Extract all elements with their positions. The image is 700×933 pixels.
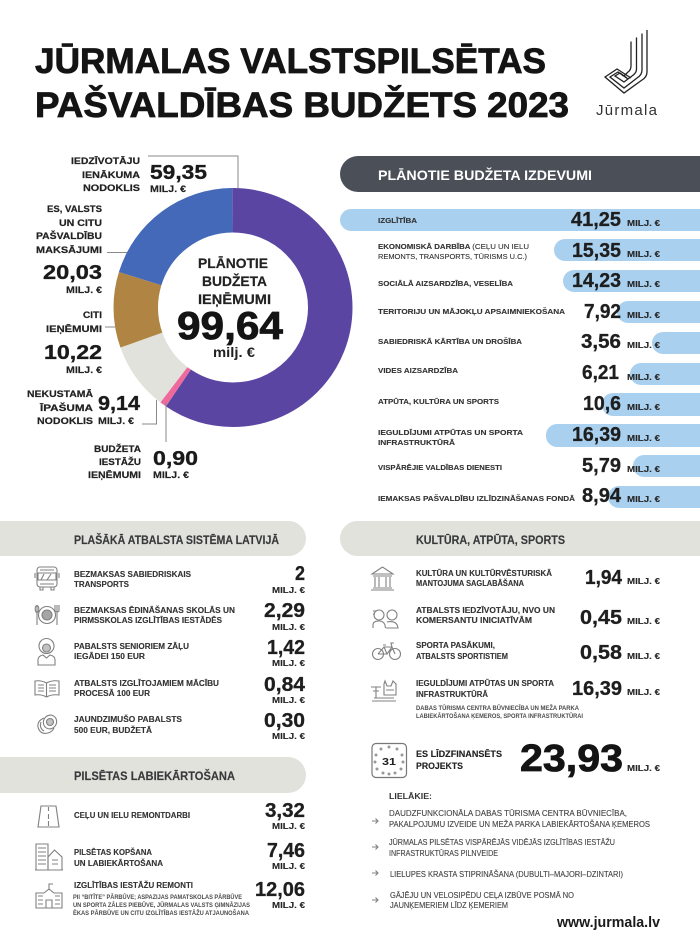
item: community initiatives [416,606,660,629]
item: city maintenance: MILJ. € [272,861,305,871]
revenue label: income tax: IENĀKUMA [82,170,140,181]
row: territory and housing: TERITORIJU UN MĀJOKĻU APSAIMNIEKOŠANA [378,307,566,316]
item: sports events: ATBALSTS SPORTISTIEM [416,652,508,661]
item: community initiatives: ATBALSTS IEDZĪVOTĀJU, NVO UN [416,606,555,615]
EU co-financed total [416,738,660,780]
list: largest projects: PAKALPOJUMU IZVEIDE UN MEŽA PARKA LABIEKĀRTOŠANA ĶEMEROS [389,820,650,829]
item: school repairs: 12,06 [255,879,305,901]
revenue label: institutions: BUDŽETA [94,443,141,455]
item: free school meals: BEZMAKSAS ĒDINĀŠANAS SKOLĀS UN [74,606,235,615]
list: largest projects: GĀJĒJU UN VELOSIPĒDU CEĻA IZBŪVE POSMĀ NO [390,891,574,900]
revenue label: income tax [71,156,238,195]
icon: senior [38,638,55,665]
row: equalisation fund: IEMAKSAS PAŠVALDĪBU IZLĪDZINĀŠANAS FONDĀ [378,494,576,503]
row: economic activity: 15,35 [572,240,621,262]
revenue label: institutions: IESTĀŽU [99,456,141,468]
item: free school meals: 2,29 [264,600,305,622]
item: cultural heritage: KULTŪRA UN KULTŪRVĒSTURISKĀ [416,569,552,578]
list: largest projects: LIELĀKIE: [389,791,432,801]
title [35,42,569,125]
heading: wider support system [0,521,306,556]
row: economic activity: EKONOMISKĀ DARBĪBA (CEĻU UN IELU [378,242,529,251]
revenue label: property tax: MILJ. € [98,416,135,427]
row: economic activity: REMONTS, TRANSPORTS, TŪRISMS U.C.) [378,252,527,261]
revenue label: property tax: NEKUSTAMĀ [27,389,93,400]
item: cultural heritage: 1,94 [585,567,623,589]
revenue label: property tax: NODOKLIS [37,416,93,427]
website: www.jurmala.lv [556,914,661,931]
icon: road [38,806,59,827]
row: investments: 16,39 [572,424,621,446]
revenue label: other: 10,22 [44,341,102,364]
panel: culture items [371,567,660,720]
icon: plate and cutlery [35,605,59,625]
arrow: project 4 [372,898,378,902]
row: environment: MILJ. € [627,372,660,382]
item: cultural heritage: MILJ. € [627,576,660,586]
heading: planned expenditure [340,156,700,192]
item: free public transport: TRANSPORTS [74,580,130,589]
item: city maintenance: 7,46 [267,840,305,862]
row: education [340,209,700,231]
list: largest projects [372,791,650,910]
icon: book [35,681,59,697]
icon: school [36,884,62,908]
row: recreation, culture, sport: 10,6 [583,393,621,415]
row: investments [378,424,700,447]
item: sports infrastructure: INFRASTRUKTŪRĀ [416,690,488,699]
logo: Jūrmala [596,30,658,119]
item: senior benefit: IEGĀDEI 150 EUR [74,652,145,661]
row: public order [378,331,700,354]
item: road repairs: CEĻU UN IELU REMONTDARBI [74,811,190,820]
revenue label: institutions: IEŅĒMUMI [88,470,141,481]
item: sports events: 0,58 [580,642,622,664]
item: school repairs: MILJ. € [272,900,305,910]
donut centre total: PLĀNOTIE [198,255,268,271]
item: free school meals: PIRMSSKOLAS IZGLĪTĪBAS IESTĀDĒS [74,616,223,625]
arrow: project 3 [372,870,378,876]
item: road repairs [74,800,305,831]
row: general government [378,455,700,477]
row: investments: INFRASTRUKTŪRĀ [378,438,456,447]
donut centre total: IEŅĒMUMI [198,291,271,307]
title: PAŠVALDĪBAS BUDŽETS 2023 [35,85,569,125]
item: student support: ATBALSTS IZGLĪTOJAMIEM MĀCĪBU [74,679,219,688]
heading: city improvement: PILSĒTAS LABIEKĀRTOŠANA [74,768,235,783]
row: education: IZGLĪTĪBA [378,216,418,225]
icon: temple [371,567,394,590]
row: equalisation fund: MILJ. € [627,494,660,504]
list: largest projects: INFRASTRUKTŪRAS PILNVEIDE [389,849,498,858]
heading: planned expenditure: PLĀNOTIE BUDŽETA IZDEVUMI [378,166,592,183]
item: senior benefit: 1,42 [267,637,305,659]
revenue label: other: IEŅĒMUMI [46,324,102,335]
panel: wider support items [35,563,306,741]
row: environment [378,362,700,385]
list: largest projects: JŪRMALAS PILSĒTAS VISPĀRĒJĀS VIDĒJĀS IZGLĪTĪBAS IESTĀŽU [389,838,615,847]
row: investments: MILJ. € [627,433,660,443]
row: public order: SABIEDRISKĀ KĀRTĪBA UN DROŠĪBA [378,337,523,346]
row: general government: 5,79 [582,455,621,477]
row: recreation, culture, sport [378,393,700,416]
row: economic activity: MILJ. € [627,249,660,259]
revenue label: EU, state payments: 20,03 [43,261,102,284]
item: student support [74,674,306,705]
row: general government: VISPĀRĒJIE VALDĪBAS DIENESTI [378,463,502,472]
revenue label: property tax: 9,14 [98,392,141,415]
revenue label: institutions: MILJ. € [153,470,190,481]
item: cultural heritage: MANTOJUMA SAGLABĀŠANA [416,579,524,588]
item: sports infrastructure: MILJ. € [627,687,660,697]
item: sports events: MILJ. € [627,651,660,661]
revenue label: income tax: 59,35 [150,161,207,184]
revenue label: EU, state payments: MAKSĀJUMI [36,245,102,256]
item: school repairs: UN SPORTA ZĀLES PIEBŪVE, JŪRMALAS VALSTS ĢIMNĀZIJAS [73,902,250,909]
item: sports infrastructure: DABAS TŪRISMA CENTRA BŪVNIECĪBA UN MEŽA PARKA [416,704,580,712]
revenue label: income tax: IEDZĪVOTĀJU [71,156,140,167]
item: free public transport: MILJ. € [272,585,305,595]
revenue label: EU, state payments: MILJ. € [66,285,103,296]
item: newborn benefit: 0,30 [264,710,305,732]
icon: city buildings [35,844,63,870]
row: social protection: SOCIĀLĀ AIZSARDZĪBA, VESELĪBA [378,279,514,288]
revenue label: EU, state payments: ES, VALSTS [47,204,102,215]
item: free school meals [74,600,305,632]
icon: people [373,610,398,628]
item: road repairs: 3,32 [265,800,305,822]
item: school repairs: IZGLĪTĪBAS IESTĀŽU REMONTI [74,881,193,890]
revenue label: EU, state payments: PAŠVALDĪBU [36,230,102,242]
item: newborn benefit [74,710,305,741]
item: school repairs: PII “BITĪTE” PĀRBŪVE; ASPAZIJAS PAMATSKOLAS PĀRBŪVE [73,894,242,901]
donut centre total: BUDŽETA [202,272,267,289]
list: largest projects: LIELUPES KRASTA STIPRINĀŠANA (DUBULTI–MAJORI–DZINTARI) [390,870,623,879]
list: largest projects: DAUDZFUNKCIONĀLA DABAS TŪRISMA CENTRA BŪVNIECĪBA, [389,809,627,818]
row: equalisation fund [378,485,700,508]
row: general government: MILJ. € [627,464,660,474]
item: city maintenance: PILSĒTAS KOPŠANA [74,848,152,857]
item: sports events [416,641,660,664]
revenue label: EU, state payments: UN CITU [59,218,102,229]
donut centre total [177,255,283,360]
row: environment: 6,21 [582,362,619,384]
item: community initiatives: 0,45 [580,607,622,629]
item: school repairs [73,879,305,917]
EU co-financed total: ES LĪDZFINANSĒTS [416,749,502,759]
heading: wider support system: PLAŠĀKĀ ATBALSTA SISTĒMA LATVIJĀ [74,532,279,547]
item: road repairs: MILJ. € [272,821,305,831]
arrow: project 2 [372,844,378,850]
arrow: project 1 [372,818,378,824]
row: education: 41,25 [571,209,621,231]
item: sports infrastructure: LABIEKĀRTOŠANA ĶEMEROS, SPORTA INFRASTRUKTŪRAI [416,712,583,720]
item: senior benefit: MILJ. € [272,658,305,668]
item: school repairs: ĒKAS PĀRBŪVE UN CITU IZGLĪTĪBAS IESTĀŽU ATJAUNOŠANA [73,909,250,917]
revenue label: institutions [88,402,198,481]
revenue label: property tax: ĪPAŠUMA [39,402,93,414]
item: student support: PROCESĀ 100 EUR [74,689,150,698]
item: newborn benefit: MILJ. € [272,731,305,741]
item: student support: 0,84 [264,674,306,696]
heading: culture, recreation, sports [340,521,700,556]
row: territory and housing [378,301,700,323]
item: newborn benefit: 500 EUR, BUDŽETĀ [74,726,152,735]
row: social protection [378,270,700,292]
revenue label: institutions: 0,90 [153,447,198,470]
EU co-financed total: MILJ. € [627,763,660,773]
item: free public transport: BEZMAKSAS SABIEDRISKAIS [74,570,192,579]
revenue label: property tax [27,389,156,427]
row: territory and housing: MILJ. € [627,310,660,320]
item: sports infrastructure [416,678,660,720]
row: public order: MILJ. € [627,340,660,350]
item: senior benefit [74,637,305,668]
title: JŪRMALAS VALSTSPILSĒTAS [35,42,546,81]
revenue label: other [44,310,115,376]
EU co-financed total: PROJEKTS [416,761,463,771]
row: recreation, culture, sport: MILJ. € [627,402,660,412]
heading: city improvement [0,757,306,793]
logo: Jūrmala: Jūrmala [596,102,658,119]
icon: bus [35,567,59,590]
item: free school meals: MILJ. € [272,622,305,632]
icon: sports kit [371,681,396,701]
donut chart: planned revenue [136,210,330,405]
icon: bicycle [372,643,400,660]
icon: EU calendar 31: 31 [382,756,396,768]
icon: coins [38,713,59,733]
revenue label: income tax: NODOKLIS [83,183,140,194]
item: city maintenance [74,840,305,871]
row: education: MILJ. € [627,218,660,228]
item: senior benefit: PABALSTS SENIORIEM ZĀĻU [74,642,189,651]
item: community initiatives: MILJ. € [627,616,660,626]
row: territory and housing: 7,92 [584,301,621,323]
item: free public transport [74,563,305,595]
revenue label: EU, state payments [36,204,127,296]
donut centre total: milj. € [213,344,255,360]
revenue label: income tax: MILJ. € [150,184,187,195]
EU co-financed total: 23,93 [520,738,623,780]
item: free public transport: 2 [295,563,305,585]
donut centre total: 99,64 [177,305,283,348]
row: investments: IEGULDĪJUMI ATPŪTAS UN SPORTA [378,428,524,437]
item: community initiatives: KOMERSANTU INICIATĪVĀM [416,616,532,625]
item: cultural heritage [416,567,660,589]
item: sports infrastructure: IEGULDĪJUMI ATPŪTAS UN SPORTA [416,679,554,688]
item: sports infrastructure: 16,39 [572,678,622,700]
revenue label: other: CITI [83,310,102,321]
row: social protection: 14,23 [572,270,621,292]
row: social protection: MILJ. € [627,279,660,289]
icon: EU calendar 31 [372,744,406,778]
panel: city improvement items [35,800,305,917]
item: sports events: SPORTA PASĀKUMI, [416,641,495,650]
list: largest projects: JAUNĶEMERIEM LĪDZ ĶEMERIEM [390,901,508,910]
item: newborn benefit: JAUNDZIMUŠO PABALSTS [74,715,183,724]
item: student support: MILJ. € [272,695,305,705]
row: environment: VIDES AIZSARDZĪBA [378,366,459,375]
row: economic activity [378,239,700,262]
heading: culture, recreation, sports: KULTŪRA, ATPŪTA, SPORTS [416,533,565,547]
row: equalisation fund: 8,94 [582,485,622,507]
revenue label: other: MILJ. € [66,365,103,376]
item: city maintenance: UN LABIEKĀRTOŠANA [74,859,163,868]
row: public order: 3,56 [581,331,621,353]
expenditure bars [340,209,700,508]
row: recreation, culture, sport: ATPŪTA, KULTŪRA UN SPORTS [378,397,499,406]
